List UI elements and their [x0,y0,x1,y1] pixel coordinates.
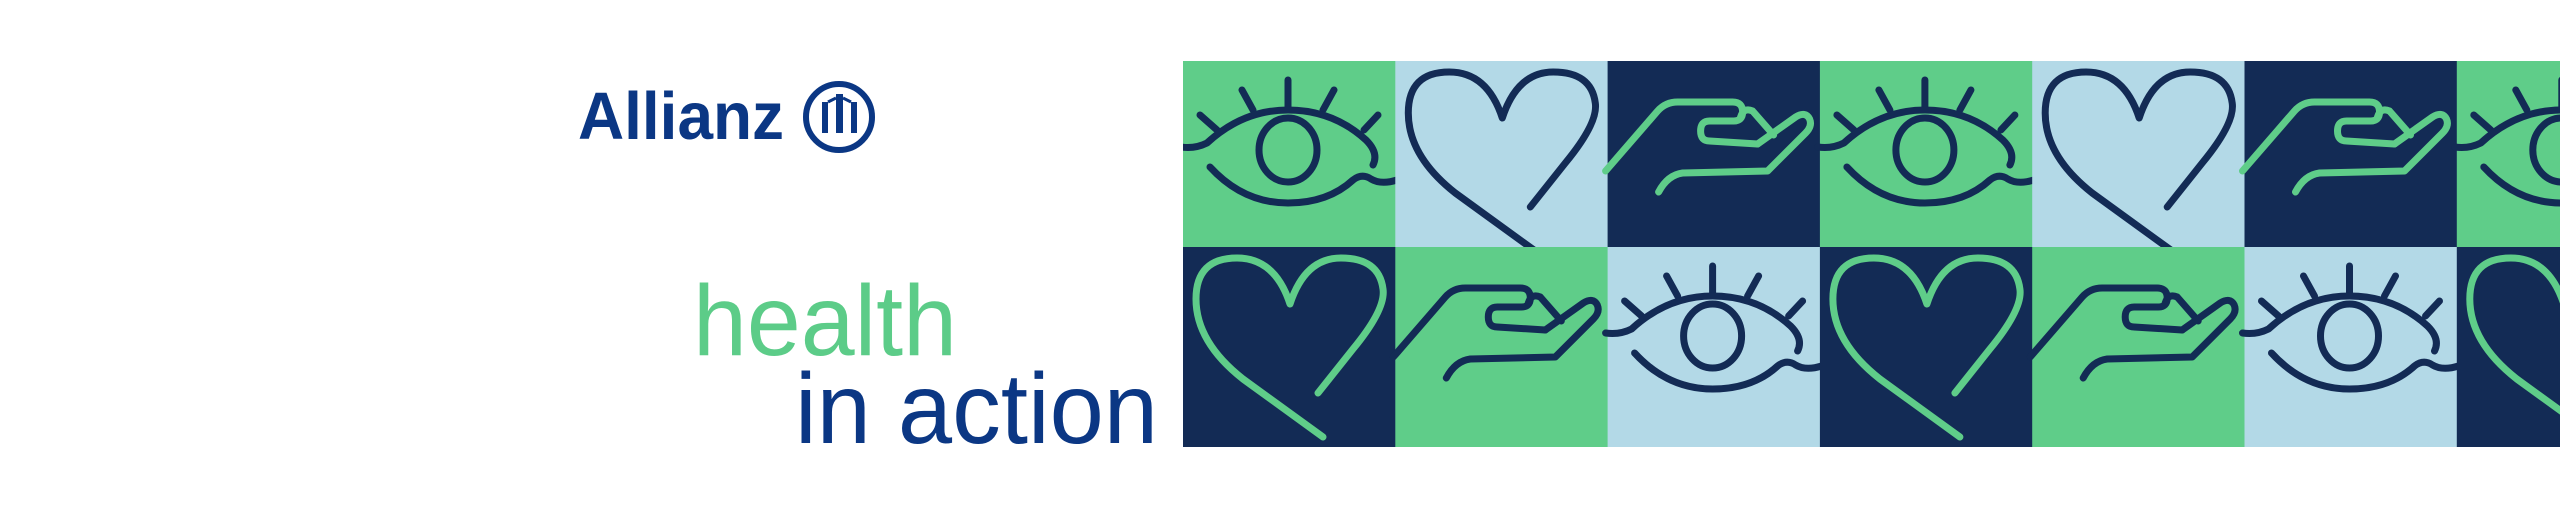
panel: icon tile grid [1181,61,2560,447]
row 1 [1181,61,2560,251]
icon: Allianz eagle circle [806,84,872,150]
logo: Allianz wordmark: Allianz [578,79,784,154]
title: in action: in action [795,353,1158,465]
title: health: health [693,265,957,377]
row 2 [1183,247,2560,447]
